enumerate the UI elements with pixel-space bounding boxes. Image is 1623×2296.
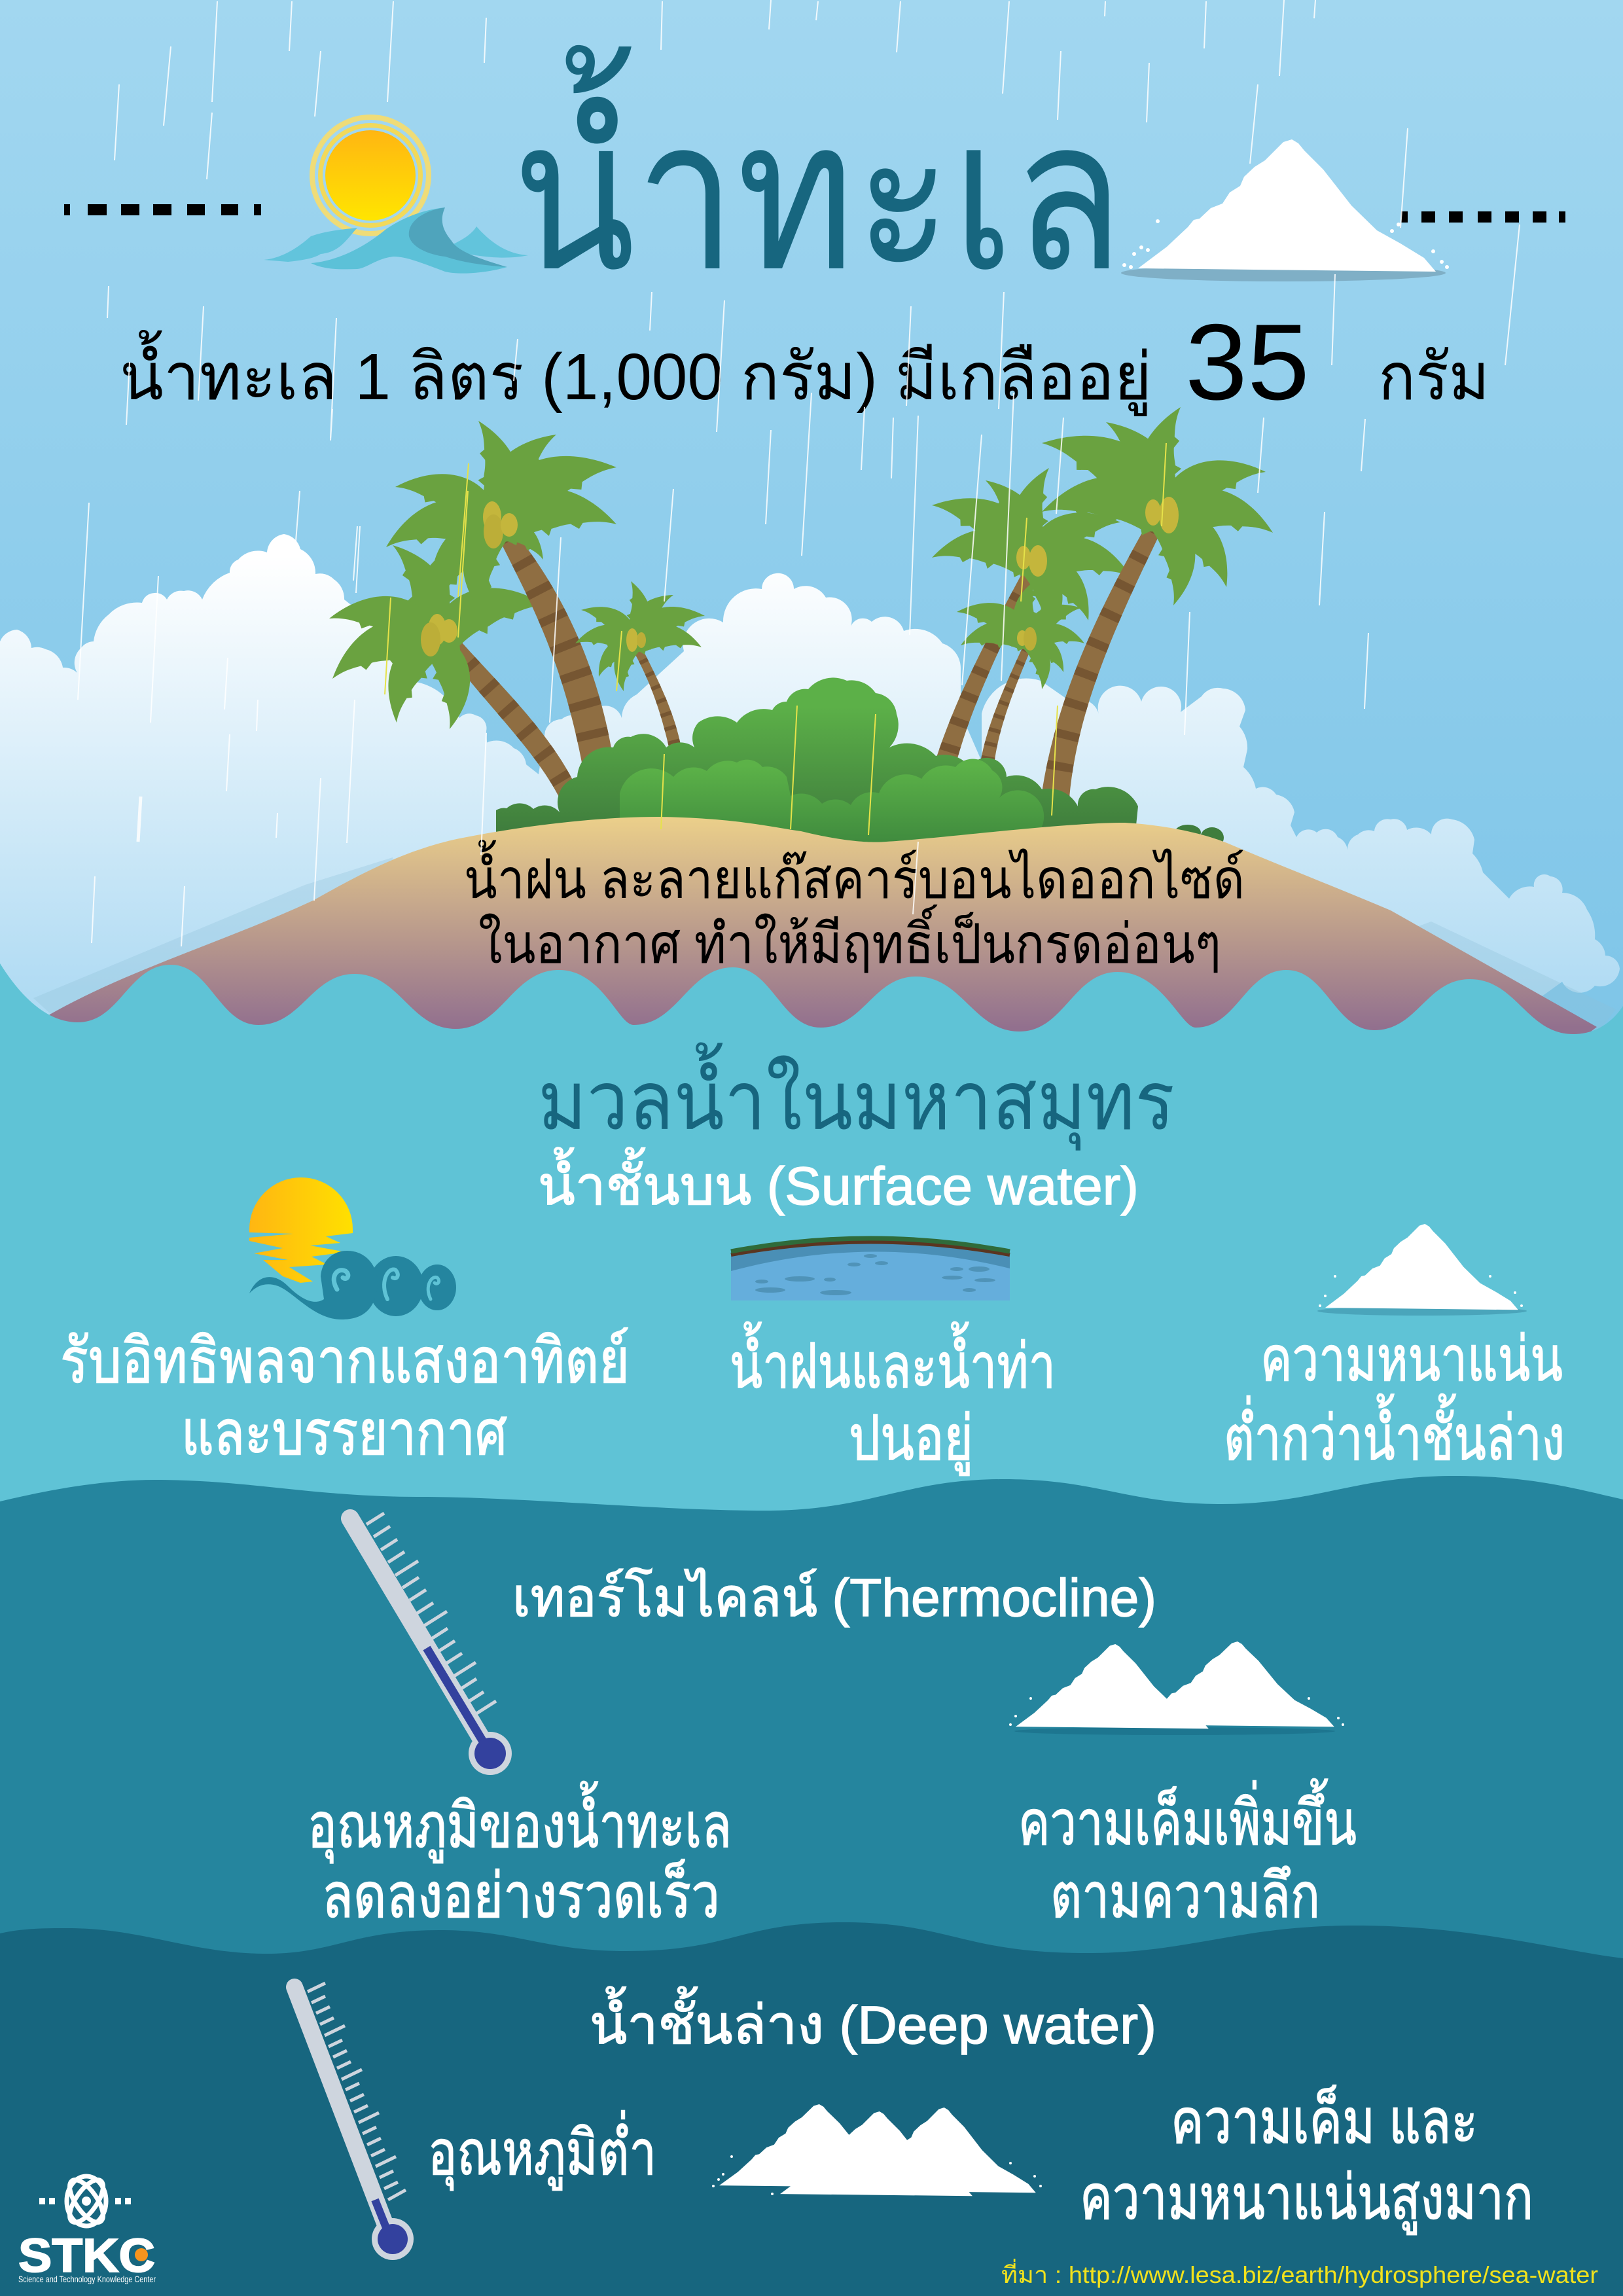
logo: STKC [18, 2175, 156, 2284]
sky background [0, 0, 1623, 1047]
bushes: front layer [620, 759, 1044, 851]
yellow rain streaks [385, 443, 1166, 835]
text: salinity increases with depth: ตามความลึก [1050, 1861, 1320, 1931]
icon: three salt piles [712, 2104, 1042, 2196]
icon: thermometer deep [294, 1983, 414, 2260]
heading: surface water: น้ำชั้นบน (Surface water) [538, 1147, 1139, 1216]
text: lower density than deep water [1224, 1325, 1565, 1473]
text: temperature falls rapidly [308, 1781, 732, 1931]
heading: deep water: น้ำชั้นล่าง (Deep water) [590, 1986, 1156, 2055]
subtitle: sea water salinity: น้ำทะเล 1 ลิตร (1,000 กรัม) มีเกลืออยู่ [120, 330, 1152, 416]
text: low temperature: อุณหภูมิต่ำ [428, 2110, 656, 2191]
decorative dashes right [1401, 211, 1565, 223]
icon: two salt piles [1009, 1641, 1344, 1735]
icon: thermometer thermocline [350, 1513, 512, 1775]
bushes: small right pair [1175, 825, 1224, 848]
icon: salt pile surface [1317, 1224, 1527, 1316]
text: very high salinity and density: ความเค็ม และ [1171, 2085, 1478, 2157]
palm: tall left [379, 416, 626, 826]
title: น้ำทะเล [512, 45, 1124, 314]
heading: thermocline: เทอร์โมไคลน์ (Thermocline) [512, 1568, 1156, 1628]
subtitle: sea water salinity: 35 [1185, 302, 1310, 422]
logo wordmark: STKC [18, 2230, 155, 2282]
text: influenced by sun and atmosphere: และบรรยากาศ [181, 1399, 507, 1468]
island caption: ในอากาศ ทำให้มีฤทธิ์เป็นกรดอ่อนๆ [478, 904, 1221, 975]
icon: sun and waves [264, 115, 528, 274]
deep water band [0, 1922, 1623, 2296]
decorative dashes left [64, 204, 261, 215]
logo tagline: Science and Technology Knowledge Center [18, 2274, 156, 2284]
palm: far left leaning [320, 532, 582, 808]
icon: salt pile top [1121, 139, 1449, 281]
subtitle: sea water salinity: กรัม [1378, 340, 1489, 414]
palm: right back tall [932, 468, 1124, 758]
text: rain and runoff mixed in: น้ำฝนและน้ำท่า [730, 1321, 1056, 1401]
logo emblem [39, 2175, 134, 2227]
cloud: centre bank [437, 573, 1021, 851]
palm: tall right [1042, 407, 1273, 796]
text: influenced by sun and atmosphere [60, 1327, 630, 1468]
island haze shadow [33, 857, 1616, 1034]
text: rain and runoff mixed in [730, 1321, 1056, 1476]
text: rain and runoff mixed in: ปนอยู่ [849, 1404, 973, 1476]
text: influenced by sun and atmosphere: รับอิทธิพลจากแสงอาทิตย์ [60, 1327, 630, 1396]
text: temperature falls rapidly: อุณหภูมิของน้ำทะเล [308, 1781, 732, 1863]
island caption: น้ำฝน ละลายแก๊สคาร์บอนไดออกไซด์ [464, 840, 1245, 910]
cloud: left bank [0, 534, 497, 1021]
island sand [26, 817, 1597, 1047]
icon: setting sun over curling waves [249, 1177, 456, 1319]
bushes: back layer [496, 677, 1138, 844]
thermocline band [0, 1476, 1623, 1964]
cloud: right bank [982, 678, 1620, 1021]
island caption [464, 840, 1245, 975]
icon: pool of rain water [731, 1238, 1010, 1300]
text: very high salinity and density [1080, 2085, 1533, 2235]
palm: small right [957, 584, 1084, 759]
rain streaks [78, 0, 1520, 946]
palm: small left [575, 580, 709, 753]
subtitle: sea water salinity [120, 302, 1489, 422]
text: salinity increases with depth: ความเค็มเพิ่มขึ้น [1018, 1778, 1357, 1858]
text: salinity increases with depth [1018, 1778, 1357, 1931]
heading: ocean water masses: มวลน้ำในมหาสมุทร [538, 1042, 1175, 1151]
source line: ที่มา : http://www.lesa.biz/earth/hydrosphere/sea-water [1001, 2259, 1598, 2288]
sea surface wave [0, 963, 1623, 1571]
text: temperature falls rapidly: ลดลงอย่างรวดเร็ว [322, 1859, 720, 1931]
logo orange dot [135, 2248, 148, 2261]
